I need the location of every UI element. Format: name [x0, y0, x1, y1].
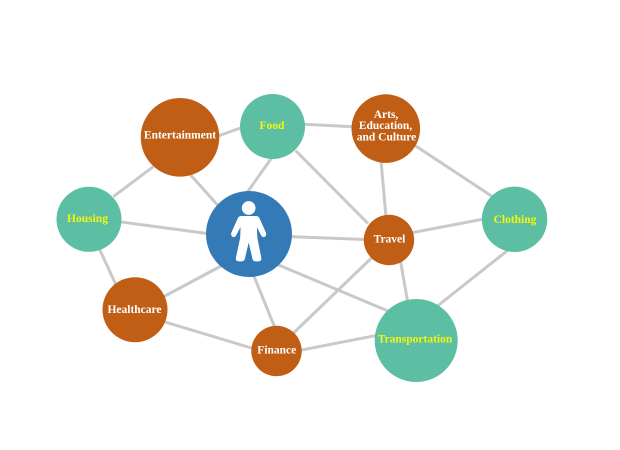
node: Food: Food [260, 120, 285, 132]
node: Clothing: Clothing [494, 214, 537, 226]
node: Travel: Travel [374, 234, 405, 246]
node: Healthcare [102, 277, 168, 342]
node: Entertainment: Entertainment [144, 130, 216, 142]
node: Entertainment [141, 98, 219, 177]
node: Housing [56, 187, 122, 252]
node: Clothing [482, 187, 547, 252]
node: Arts, Education, and Culture: Education, [359, 120, 412, 132]
node: Food [240, 94, 305, 159]
node: Healthcare: Healthcare [107, 304, 162, 316]
node: Arts, Education, and Culture [352, 94, 420, 163]
node: Finance: Finance [257, 344, 296, 356]
node: Transportation [375, 299, 458, 382]
node: person center [206, 191, 292, 277]
node: Arts, Education, and Culture: and Culture [357, 132, 416, 144]
node: Arts, Education, and Culture: Arts, [374, 109, 398, 121]
network connections [99, 124, 508, 350]
node: Finance [251, 326, 302, 376]
node: Housing: Housing [67, 213, 108, 225]
node: Transportation: Transportation [378, 334, 453, 346]
icon: person [231, 202, 266, 261]
node: Travel [364, 215, 414, 265]
